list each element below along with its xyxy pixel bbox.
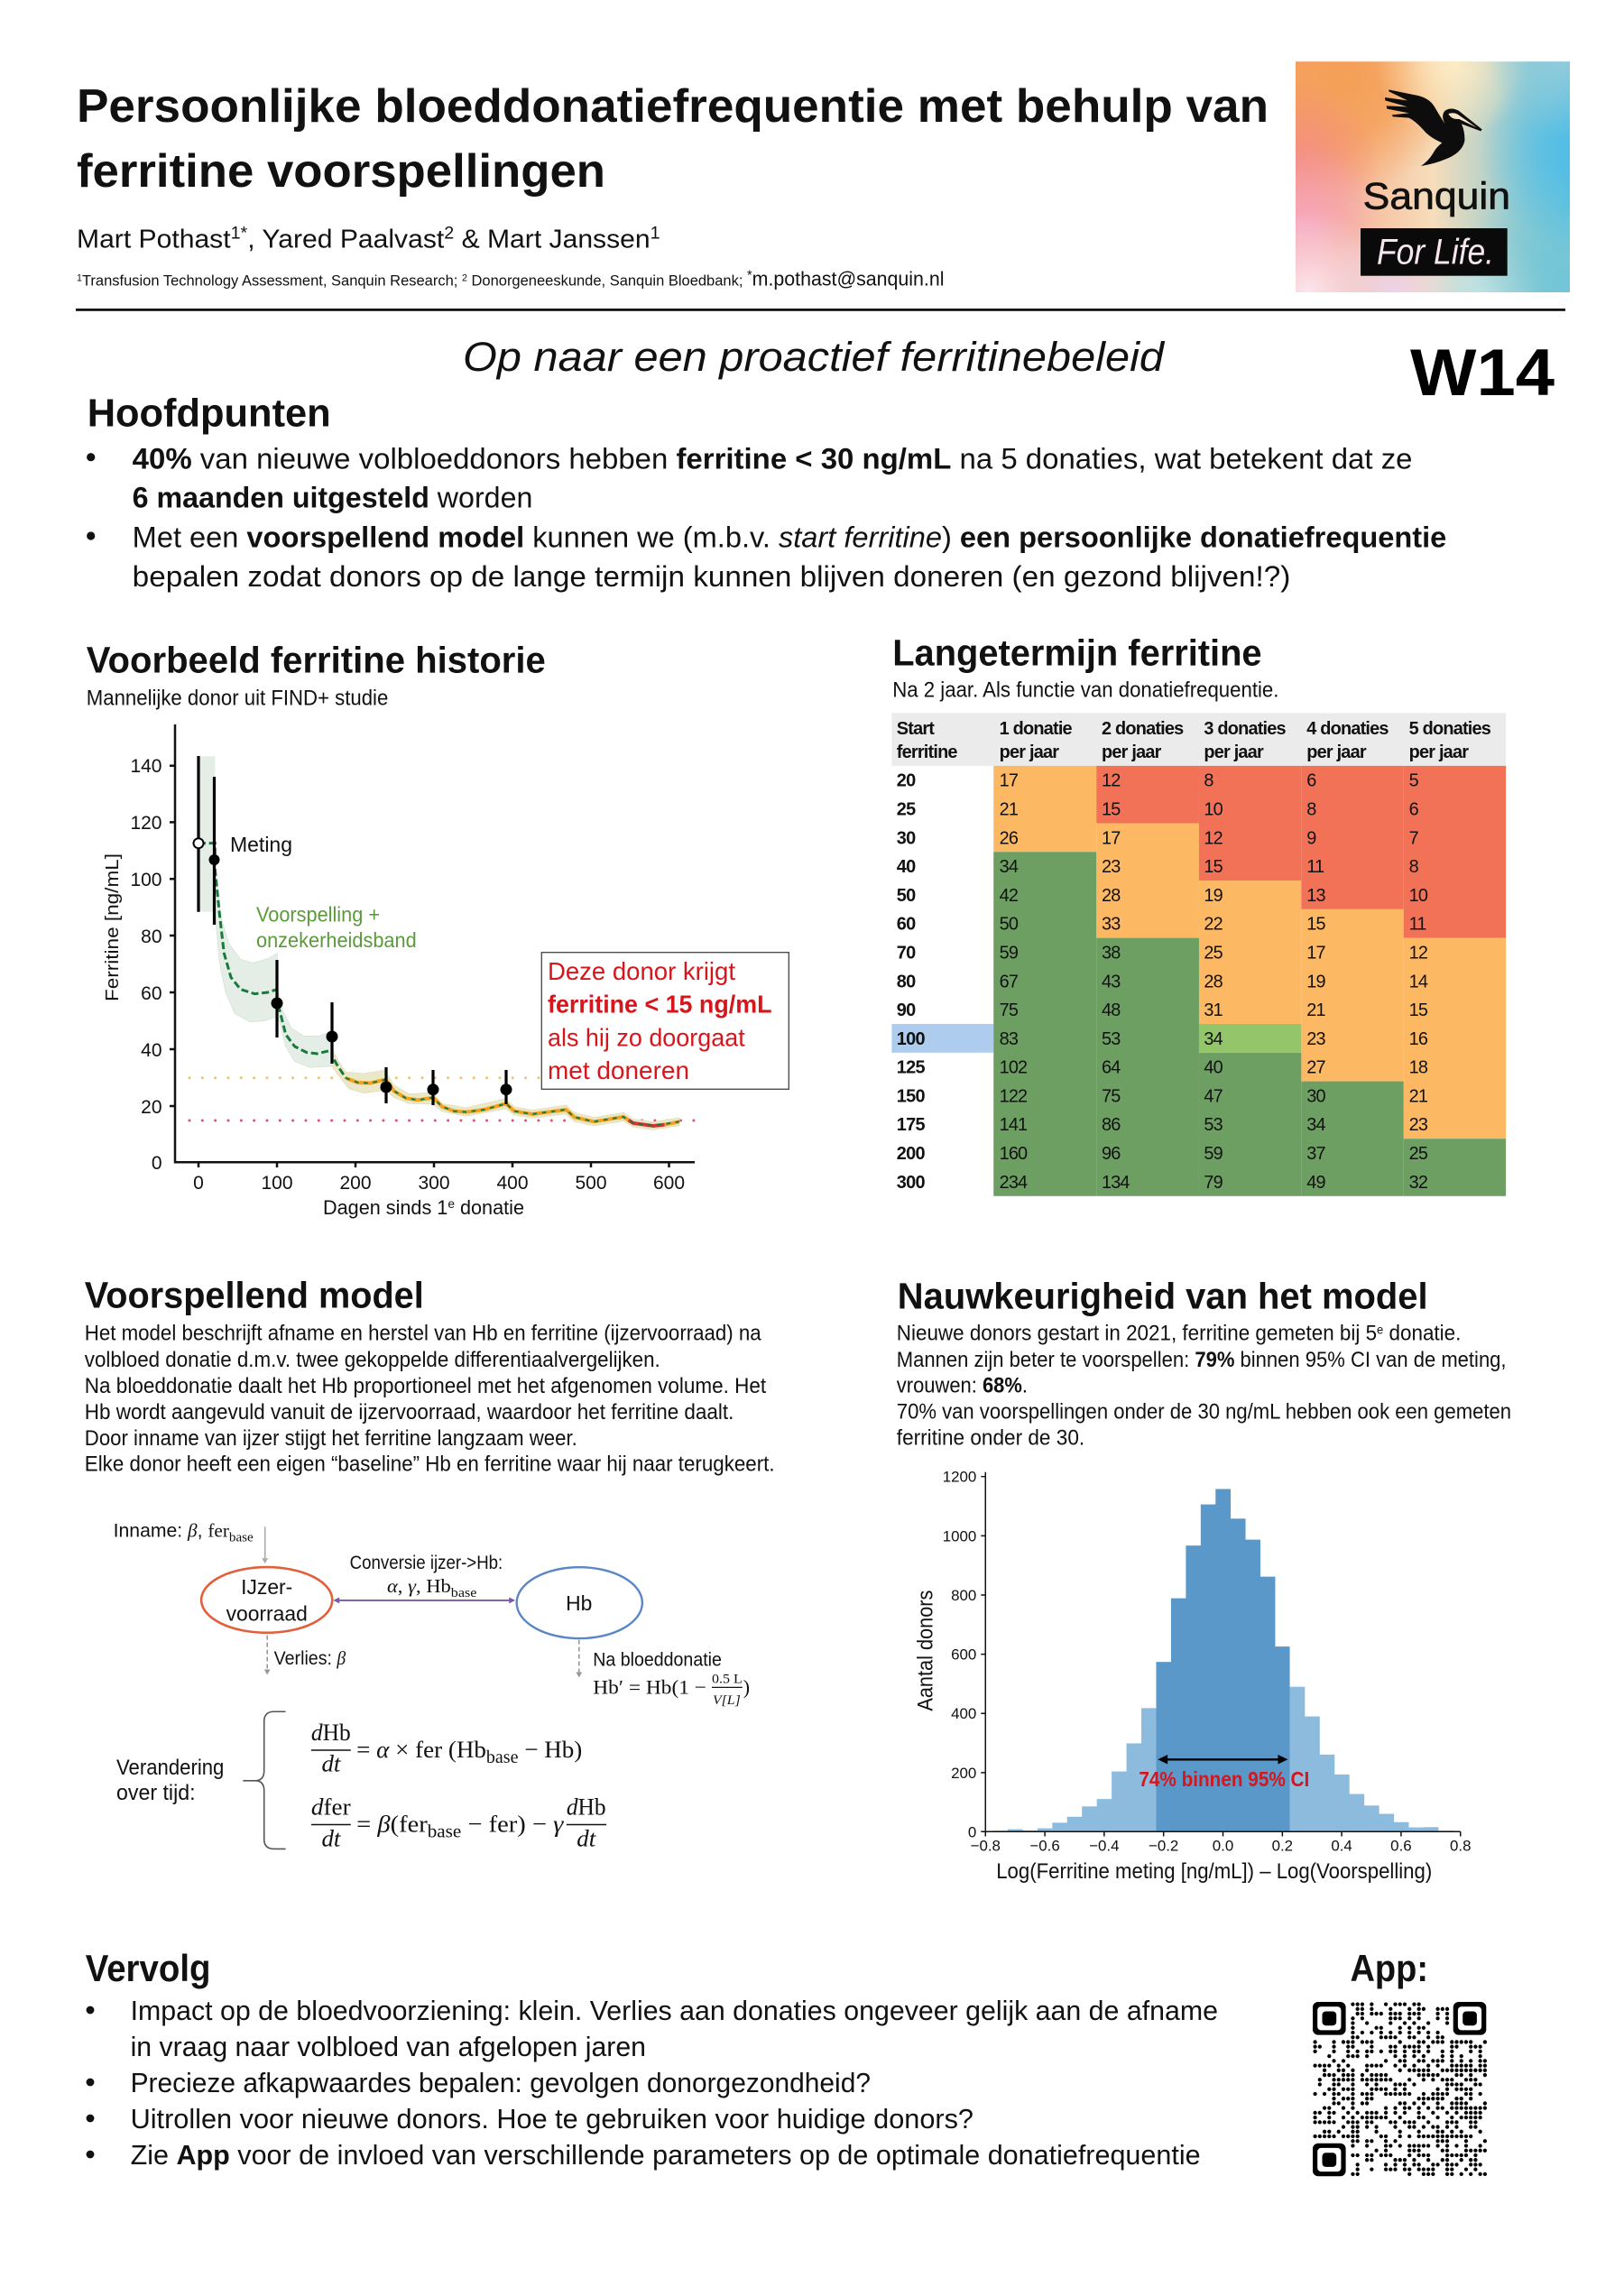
table rows: 43 xyxy=(1102,972,1121,991)
title: ferritine voorspellingen xyxy=(77,145,605,198)
table rows: 27 xyxy=(1306,1058,1325,1078)
table rows: 28 xyxy=(1204,972,1223,991)
affiliations: 1 xyxy=(77,273,82,284)
arrow: inname xyxy=(262,1526,268,1563)
table header: 3 donaties xyxy=(1204,719,1287,739)
text block: model description: Na bloeddonatie daalt het Hb proportioneel met het afgenomen volume. Het xyxy=(85,1374,766,1398)
table rows: 125 xyxy=(897,1058,926,1078)
bullet list: vervolg: Precieze afkapwaardes bepalen: gevolgen donorgezondheid? xyxy=(131,2067,871,2098)
x axis labels: −0.6 xyxy=(1029,1837,1060,1854)
table rows: 8 xyxy=(1204,771,1213,791)
table header: per jaar xyxy=(1306,742,1367,762)
panel: langetermijn ferritine xyxy=(891,632,1506,1196)
table header: Start xyxy=(897,719,935,739)
bullet list: hoofdpunten xyxy=(87,442,1446,593)
label: voorspelling: onzekerheidsband xyxy=(256,928,417,952)
arrow: bloeddonatie xyxy=(576,1640,582,1677)
table rows: 32 xyxy=(1409,1173,1428,1193)
equation: dfer/dt: dfer xyxy=(311,1793,351,1821)
table rows: 19 xyxy=(1204,886,1223,906)
table rows: 102 xyxy=(1000,1058,1028,1078)
x axis labels: 400 xyxy=(496,1173,529,1194)
subheading: langetermijn: Na 2 jaar. Als functie van donatiefrequentie. xyxy=(892,678,1278,702)
text block: accuracy: 70% van voorspellingen onder de 30 ng/mL hebben ook een gemeten xyxy=(897,1400,1511,1425)
table rows: 50 xyxy=(1000,915,1019,935)
equation: dfer/dt: dt xyxy=(577,1824,596,1851)
callout: donor warning xyxy=(541,953,789,1089)
table rows: 49 xyxy=(1306,1173,1325,1193)
table rows: 60 xyxy=(897,915,916,935)
table rows: 8 xyxy=(1409,857,1419,877)
table rows: 10 xyxy=(1204,800,1223,820)
text block: model description: Hb wordt aangevuld vanuit de ijzervoorraad, waardoor het ferritine daalt. xyxy=(85,1400,734,1425)
table rows: 17 xyxy=(1102,828,1121,848)
y axis labels: 400 xyxy=(951,1705,976,1722)
title: Persoonlijke bloeddonatiefrequentie met behulp van xyxy=(77,80,1269,133)
line chart: ferritine history xyxy=(103,724,789,1219)
table rows: 90 xyxy=(897,1000,916,1020)
formula: na bloeddonatie: ) xyxy=(743,1676,750,1698)
table rows: 38 xyxy=(1102,944,1121,963)
label: conversie xyxy=(350,1553,503,1600)
label: meting: Meting xyxy=(230,833,292,856)
equation: dfer/dt: base xyxy=(428,1821,461,1841)
table rows: 26 xyxy=(1000,828,1019,848)
label: voorspelling xyxy=(256,903,417,952)
table rows: 15 xyxy=(1306,915,1325,935)
equation: dfer/dt: dHb xyxy=(567,1793,606,1821)
axes xyxy=(981,1472,1461,1836)
table header: 2 donaties xyxy=(1102,719,1184,739)
brace xyxy=(243,1711,286,1849)
table rows: 21 xyxy=(1409,1086,1428,1106)
table rows: 122 xyxy=(1000,1086,1028,1106)
histogram: residuals xyxy=(914,1469,1471,1884)
node: ijzervoorraad xyxy=(201,1567,332,1633)
x axis labels: 600 xyxy=(653,1173,685,1194)
arrow: confidence interval xyxy=(1158,1755,1287,1765)
axis title y: Ferritine [ng/mL] xyxy=(103,853,123,1001)
affiliations: 2 xyxy=(462,273,467,284)
heading: nauwkeurigheid: Nauwkeurigheid van het model xyxy=(898,1276,1428,1317)
table rows: 70 xyxy=(897,944,916,963)
node: hb xyxy=(517,1567,642,1638)
authors: 1 xyxy=(651,224,660,243)
equation: dfer/dt: dt xyxy=(321,1824,341,1851)
table rows: 28 xyxy=(1102,886,1121,906)
table rows: 134 xyxy=(1102,1173,1130,1193)
y axis labels: 1000 xyxy=(943,1527,976,1544)
table rows xyxy=(897,771,1428,1193)
table rows: 30 xyxy=(897,828,916,848)
arrow: verlies xyxy=(264,1636,271,1674)
bullet list: hoofdpunten: 6 maanden uitgesteld worden xyxy=(133,482,532,514)
node: ijzervoorraad: IJzer- xyxy=(241,1575,292,1599)
equation: dHb/dt: − Hb) xyxy=(518,1736,582,1763)
table rows: 9 xyxy=(1306,828,1316,848)
table header: per jaar xyxy=(1204,742,1264,762)
axis title x: Dagen sinds 1 xyxy=(323,1196,450,1219)
table rows: 21 xyxy=(1000,800,1019,820)
table rows: 25 xyxy=(1409,1144,1428,1164)
authors: 1* xyxy=(231,224,248,243)
table rows: 23 xyxy=(1306,1029,1325,1049)
label: verandering over tijd: Verandering xyxy=(116,1756,224,1780)
y axis labels: 60 xyxy=(141,983,162,1004)
authors: , Yared Paalvast xyxy=(247,225,444,254)
table rows: 22 xyxy=(1204,915,1223,935)
formula: na bloeddonatie: Na bloeddonatie xyxy=(593,1650,722,1671)
bullet list: hoofdpunten: bepalen zodat donors op de lange termijn kunnen blijven doneren (en gezond blijven!?) xyxy=(133,560,1290,593)
subtitle: Op naar een proactief ferritinebeleid xyxy=(463,334,1166,380)
table rows: 80 xyxy=(897,972,916,991)
affiliations: * xyxy=(747,268,752,283)
table rows: 79 xyxy=(1204,1173,1223,1193)
text block: accuracy: vrouwen: 68%. xyxy=(897,1374,1028,1398)
table rows: 31 xyxy=(1204,1000,1223,1020)
table rows: 64 xyxy=(1102,1058,1121,1078)
arrow: conversie xyxy=(333,1597,515,1603)
table header: per jaar xyxy=(1409,742,1469,762)
affiliations: Donorgeneeskunde, Sanquin Bloedbank; xyxy=(467,272,747,290)
y axis labels: 120 xyxy=(130,813,162,834)
equation: dHb/dt: dt xyxy=(321,1749,341,1776)
y axis labels: 140 xyxy=(130,756,162,777)
table rows: 25 xyxy=(897,800,916,820)
poster code: W14 xyxy=(1410,337,1555,410)
table rows: 17 xyxy=(1306,944,1325,963)
x axis labels: 0.6 xyxy=(1390,1837,1412,1854)
table rows: 53 xyxy=(1102,1029,1121,1049)
table rows: 17 xyxy=(1000,771,1019,791)
table rows: 141 xyxy=(1000,1115,1028,1135)
y axis labels: 200 xyxy=(951,1765,976,1782)
table header: per jaar xyxy=(1102,742,1162,762)
text block: model description: Elke donor heeft een eigen “baseline” Hb en ferritine waar hij naar terugkeert. xyxy=(85,1452,775,1477)
formula: na bloeddonatie: 0.5 L xyxy=(712,1672,743,1686)
icon: pelican xyxy=(1385,89,1482,166)
x axis labels: 200 xyxy=(339,1173,372,1194)
x axis labels xyxy=(193,1173,685,1194)
y axis labels: 0 xyxy=(152,1153,162,1174)
table rows: 59 xyxy=(1000,944,1019,963)
measurements with error bars xyxy=(193,756,512,1105)
table rows: 15 xyxy=(1409,1000,1428,1020)
table rows: 11 xyxy=(1409,915,1426,935)
table rows: 11 xyxy=(1306,857,1324,877)
table rows: 6 xyxy=(1409,800,1419,820)
table rows: 75 xyxy=(1000,1000,1019,1020)
table rows: 12 xyxy=(1204,828,1223,848)
table rows: 7 xyxy=(1409,828,1419,848)
axis title x: Log(Ferritine meting [ng/mL]) – Log(Voorspelling) xyxy=(996,1859,1432,1884)
bullet list: vervolg: Uitrollen voor nieuwe donors. Hoe te gebruiken voor huidige donors? xyxy=(131,2103,973,2135)
label: conversie: Conversie ijzer->Hb: xyxy=(350,1553,503,1573)
equation: dHb/dt: = α × fer (Hb xyxy=(356,1736,485,1763)
node: hb: Hb xyxy=(566,1591,592,1615)
equation: dfer/dt: γ xyxy=(553,1811,565,1838)
table rows: 19 xyxy=(1306,972,1325,991)
table rows: 18 xyxy=(1409,1058,1428,1078)
table header: 5 donaties xyxy=(1409,719,1491,739)
table rows: 15 xyxy=(1102,800,1121,820)
table rows: 23 xyxy=(1409,1115,1428,1135)
x axis labels xyxy=(971,1837,1471,1854)
callout: donor warning: als hij zo doorgaat xyxy=(548,1023,745,1051)
y axis labels: 800 xyxy=(951,1587,976,1604)
equation: dfer/dt xyxy=(311,1793,606,1851)
panel: nauwkeurigheid xyxy=(897,1276,1511,1884)
table rows: 34 xyxy=(1306,1115,1325,1135)
label: voorspelling: Voorspelling + xyxy=(256,903,380,927)
text block: model description: Het model beschrijft afname en herstel van Hb en ferritine (ijzervoorraad) na xyxy=(85,1322,761,1346)
label: verandering over tijd: over tijd: xyxy=(116,1781,196,1805)
bullet list: vervolg xyxy=(87,1995,1218,2171)
table header: 1 donatie xyxy=(1000,719,1073,739)
axes xyxy=(170,724,695,1167)
table rows: 21 xyxy=(1306,1000,1325,1020)
table rows: 13 xyxy=(1306,886,1325,906)
table rows: 175 xyxy=(897,1115,926,1135)
text block: accuracy: ferritine onder de 30. xyxy=(897,1425,1084,1450)
authors: 2 xyxy=(444,224,454,243)
text block: model description xyxy=(85,1322,775,1477)
table rows: 25 xyxy=(1204,944,1223,963)
callout: donor warning: ferritine < 15 ng/mL xyxy=(548,991,772,1019)
text block: accuracy: Nieuwe donors gestart in 2021, ferritine gemeten bij 5 xyxy=(897,1322,1407,1346)
text block: model description: volbloed donatie d.m.v. twee gekoppelde differentiaalvergelijken. xyxy=(85,1348,660,1372)
equation: dfer/dt: − fer) − xyxy=(461,1811,553,1838)
x axis labels: 0.4 xyxy=(1331,1837,1352,1854)
table rows: 12 xyxy=(1102,771,1121,791)
table rows: 6 xyxy=(1306,771,1316,791)
table rows: 48 xyxy=(1102,1000,1121,1020)
x axis labels: −0.2 xyxy=(1149,1837,1178,1854)
bullet list: hoofdpunten: Met een voorspellend model kunnen we (m.b.v. start ferritine) een persoonlijke donatiefrequentie xyxy=(133,521,1446,554)
equation: dHb/dt: base xyxy=(486,1747,519,1767)
diagram: model compartments xyxy=(114,1519,750,1708)
table rows: 15 xyxy=(1204,857,1223,877)
y axis labels: 1200 xyxy=(943,1469,976,1486)
label: inname: base xyxy=(229,1530,254,1544)
callout: donor warning: met doneren xyxy=(548,1056,689,1084)
table rows: 300 xyxy=(897,1173,926,1193)
table rows: 86 xyxy=(1102,1115,1121,1135)
panel: voorbeeld ferritine historie xyxy=(87,640,789,1219)
table rows: 8 xyxy=(1306,800,1316,820)
table header: per jaar xyxy=(1000,742,1059,762)
y axis labels: 80 xyxy=(141,927,162,947)
table rows: 23 xyxy=(1102,857,1121,877)
table rows: 40 xyxy=(1204,1058,1223,1078)
heading: vervolg: Vervolg xyxy=(86,1947,211,1989)
x axis labels: 300 xyxy=(418,1173,450,1194)
x axis labels: −0.4 xyxy=(1089,1837,1120,1854)
y axis labels: 100 xyxy=(130,870,162,890)
heading: voorspellend model: Voorspellend model xyxy=(85,1275,424,1316)
bullet list: vervolg: Zie App voor de invloed van verschillende parameters op de optimale donatiefrequentie xyxy=(131,2139,1201,2171)
heading: hoofdpunten: Hoofdpunten xyxy=(88,392,331,436)
table rows: 150 xyxy=(897,1086,926,1106)
x axis labels: 0.0 xyxy=(1213,1837,1233,1854)
table rows: 96 xyxy=(1102,1144,1121,1164)
uncertainty band and prediction xyxy=(198,756,679,1130)
table rows: 47 xyxy=(1204,1086,1223,1106)
bullet list: vervolg: Impact op de bloedvoorziening: klein. Verlies aan donaties ongeveer gelijk aan de afname xyxy=(131,1995,1218,2026)
equation: dfer/dt: = β(fer xyxy=(356,1811,425,1838)
bars xyxy=(992,1489,1453,1831)
table rows: 34 xyxy=(1000,857,1019,877)
table rows: 20 xyxy=(897,771,916,791)
table header: 4 donaties xyxy=(1306,719,1389,739)
logo: Sanquin For Life xyxy=(1296,61,1570,292)
table rows: 10 xyxy=(1409,886,1428,906)
table rows: 234 xyxy=(1000,1173,1028,1193)
QR code xyxy=(1313,2002,1486,2176)
label: 74%: 74% binnen 95% CI xyxy=(1139,1767,1309,1791)
equation: dHb/dt xyxy=(311,1719,582,1776)
x axis labels: 0.8 xyxy=(1450,1837,1471,1854)
text block: accuracy: e xyxy=(1377,1323,1384,1337)
axis title y: Aantal donors xyxy=(914,1591,938,1711)
table rows: 37 xyxy=(1306,1144,1325,1164)
y axis labels: 600 xyxy=(951,1646,976,1664)
y axis labels xyxy=(943,1469,976,1840)
logo: Sanquin For Life: Sanquin xyxy=(1363,175,1510,217)
label: verlies: Verlies: β xyxy=(274,1647,346,1669)
x axis labels: −0.8 xyxy=(971,1837,1001,1854)
panel: hoofdpunten xyxy=(87,392,1446,593)
logo: Sanquin For Life: For Life. xyxy=(1377,233,1494,272)
table rows: 200 xyxy=(897,1144,926,1164)
heading: voorbeeld: Voorbeeld ferritine historie xyxy=(87,640,546,681)
y axis labels: 20 xyxy=(141,1097,162,1118)
heading: langetermijn: Langetermijn ferritine xyxy=(892,632,1262,674)
title xyxy=(77,80,1269,198)
formula: na bloeddonatie xyxy=(593,1650,750,1708)
threshold lines xyxy=(189,1078,695,1120)
affiliations: Transfusion Technology Assessment, Sanquin Research; xyxy=(82,272,462,290)
y axis labels: 0 xyxy=(968,1823,976,1840)
table header: ferritine xyxy=(897,742,957,762)
affiliations: m.pothast@sanquin.nl xyxy=(752,268,944,290)
table rows: 75 xyxy=(1102,1086,1121,1106)
callout: donor warning: Deze donor krijgt xyxy=(548,957,735,985)
axis title x: donatie xyxy=(455,1196,524,1219)
table rows: 40 xyxy=(897,857,916,877)
panel: vervolg xyxy=(86,1947,1218,2171)
authors: & Mart Janssen xyxy=(454,225,651,254)
table: ferritine by donation frequency xyxy=(891,713,1506,1196)
table rows: 14 xyxy=(1409,972,1428,991)
label: inname: Inname: β, fer xyxy=(114,1519,229,1541)
panel: voorspellend model xyxy=(85,1275,775,1851)
equation: dHb/dt: dHb xyxy=(311,1719,351,1746)
text block: accuracy: Mannen zijn beter te voorspellen: 79% binnen 95% CI van de meting, xyxy=(897,1348,1507,1372)
formula: na bloeddonatie: Hb′ = Hb(1 − xyxy=(593,1676,706,1698)
text block: accuracy: donatie. xyxy=(1383,1322,1461,1346)
table rows: 53 xyxy=(1204,1115,1223,1135)
table rows: 160 xyxy=(1000,1144,1028,1164)
heading: app: App: xyxy=(1350,1947,1428,1989)
table rows: 16 xyxy=(1409,1029,1428,1049)
x axis labels: 0 xyxy=(193,1173,204,1194)
table rows: 34 xyxy=(1204,1029,1223,1049)
table rows: 50 xyxy=(897,886,916,906)
table rows: 100 xyxy=(897,1029,926,1049)
y axis labels xyxy=(130,756,162,1174)
table rows: 42 xyxy=(1000,886,1019,906)
authors: Mart Pothast xyxy=(77,225,225,254)
label: conversie: α, γ, Hb xyxy=(387,1575,448,1597)
table rows: 83 xyxy=(1000,1029,1019,1049)
bullet list: vervolg: in vraag naar volbloed van afgelopen jaren xyxy=(131,2031,646,2062)
node: ijzervoorraad: voorraad xyxy=(226,1602,308,1626)
table rows: 67 xyxy=(1000,972,1019,991)
text block: accuracy xyxy=(897,1322,1511,1450)
equations xyxy=(311,1719,606,1851)
y axis labels: 40 xyxy=(141,1040,162,1061)
bullet list: hoofdpunten: 40% van nieuwe volbloeddonors hebben ferritine < 30 ng/mL na 5 donaties, wat betekent dat ze xyxy=(133,442,1413,475)
table rows: 12 xyxy=(1409,944,1428,963)
x axis labels: 0.2 xyxy=(1272,1837,1293,1854)
table header xyxy=(897,719,1491,762)
x axis labels: 500 xyxy=(575,1173,607,1194)
text block: model description: Door inname van ijzer stijgt het ferritine langzaam weer. xyxy=(85,1426,577,1451)
label: verandering over tijd xyxy=(116,1756,224,1805)
x axis labels: 100 xyxy=(261,1173,293,1194)
label: conversie: base xyxy=(451,1586,477,1600)
axis title x: e xyxy=(448,1196,455,1211)
formula: na bloeddonatie: V[L] xyxy=(713,1693,741,1708)
subheading: voorbeeld: Mannelijke donor uit FIND+ studie xyxy=(87,686,388,710)
table rows: 5 xyxy=(1409,771,1419,791)
table rows: 30 xyxy=(1306,1086,1325,1106)
table rows: 59 xyxy=(1204,1144,1223,1164)
table rows: 33 xyxy=(1102,915,1121,935)
